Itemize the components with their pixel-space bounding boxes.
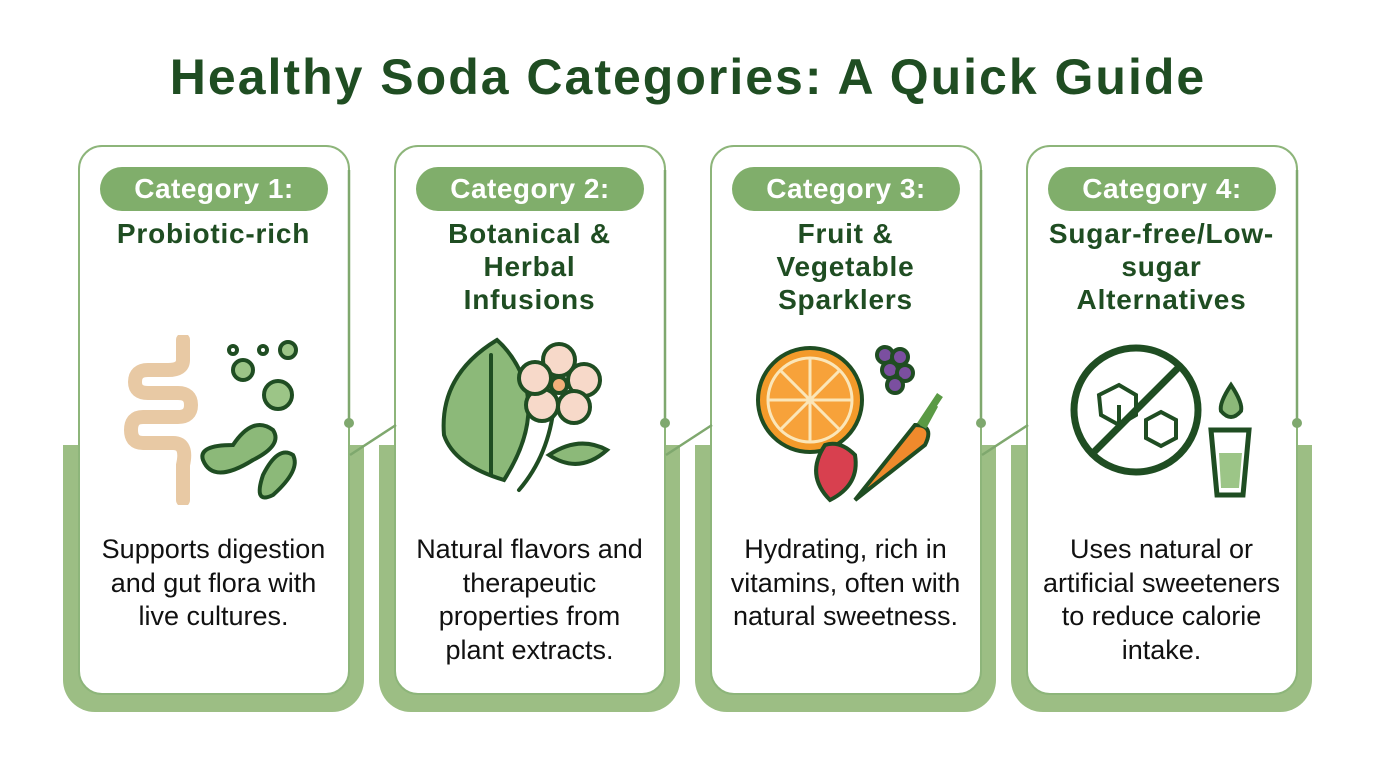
panel: category 1 [63,145,364,712]
pill 1 [100,167,328,211]
description 2: therapeutic [463,568,596,598]
subtitle 2 [448,218,611,315]
pill 1: Category 1: [134,173,294,204]
description 3: vitamins, often with [731,568,960,598]
description 2 [416,534,643,664]
description 1: and gut flora with [111,568,316,598]
description 1: Supports digestion [102,534,325,564]
subtitle 4: Alternatives [1077,284,1246,315]
description 3: natural sweetness. [733,601,958,631]
description 3 [730,534,960,631]
subtitle 3: Vegetable [777,251,914,282]
panel: category 4 [1011,145,1312,712]
description 1: live cultures. [138,601,289,631]
subtitle 1: Probiotic-rich [117,218,310,249]
title: Healthy Soda Categories: A Quick Guide [170,49,1206,105]
subtitle 3 [776,218,914,315]
icon: fruits and vegetables [756,345,943,502]
description 2: plant extracts. [445,634,614,664]
subtitle 3: Fruit & [798,218,893,249]
subtitle 2: Herbal [484,251,575,282]
subtitle 3: Sparklers [778,284,913,315]
description 3: Hydrating, rich in [744,534,947,564]
pill 4: Category 4: [1082,173,1242,204]
subtitle 4: sugar [1121,251,1202,282]
description 4: artificial sweeteners [1043,568,1280,598]
icon: no sugar and glass [1070,344,1252,498]
description 2: Natural flavors and [416,534,643,564]
description 4 [1043,534,1280,664]
panel: category 3 [695,145,996,712]
pill 3 [732,167,960,211]
pill 2 [416,167,644,211]
description 4: Uses natural or [1070,534,1253,564]
pill 3: Category 3: [766,173,926,204]
icon: gut and bacteria [124,335,298,505]
description 2: properties from [439,601,620,631]
pill 2: Category 2: [450,173,610,204]
description 1 [102,534,325,631]
icon: leaf and flower [442,338,610,492]
subtitle 4 [1049,218,1274,315]
subtitle 4: Sugar-free/Low- [1049,218,1274,249]
subtitle 2: Infusions [464,284,595,315]
panel: category 2 [379,145,680,712]
description 4: to reduce calorie [1062,601,1261,631]
pill 4 [1048,167,1276,211]
subtitle 2: Botanical & [448,218,611,249]
description 4: intake. [1122,634,1201,664]
